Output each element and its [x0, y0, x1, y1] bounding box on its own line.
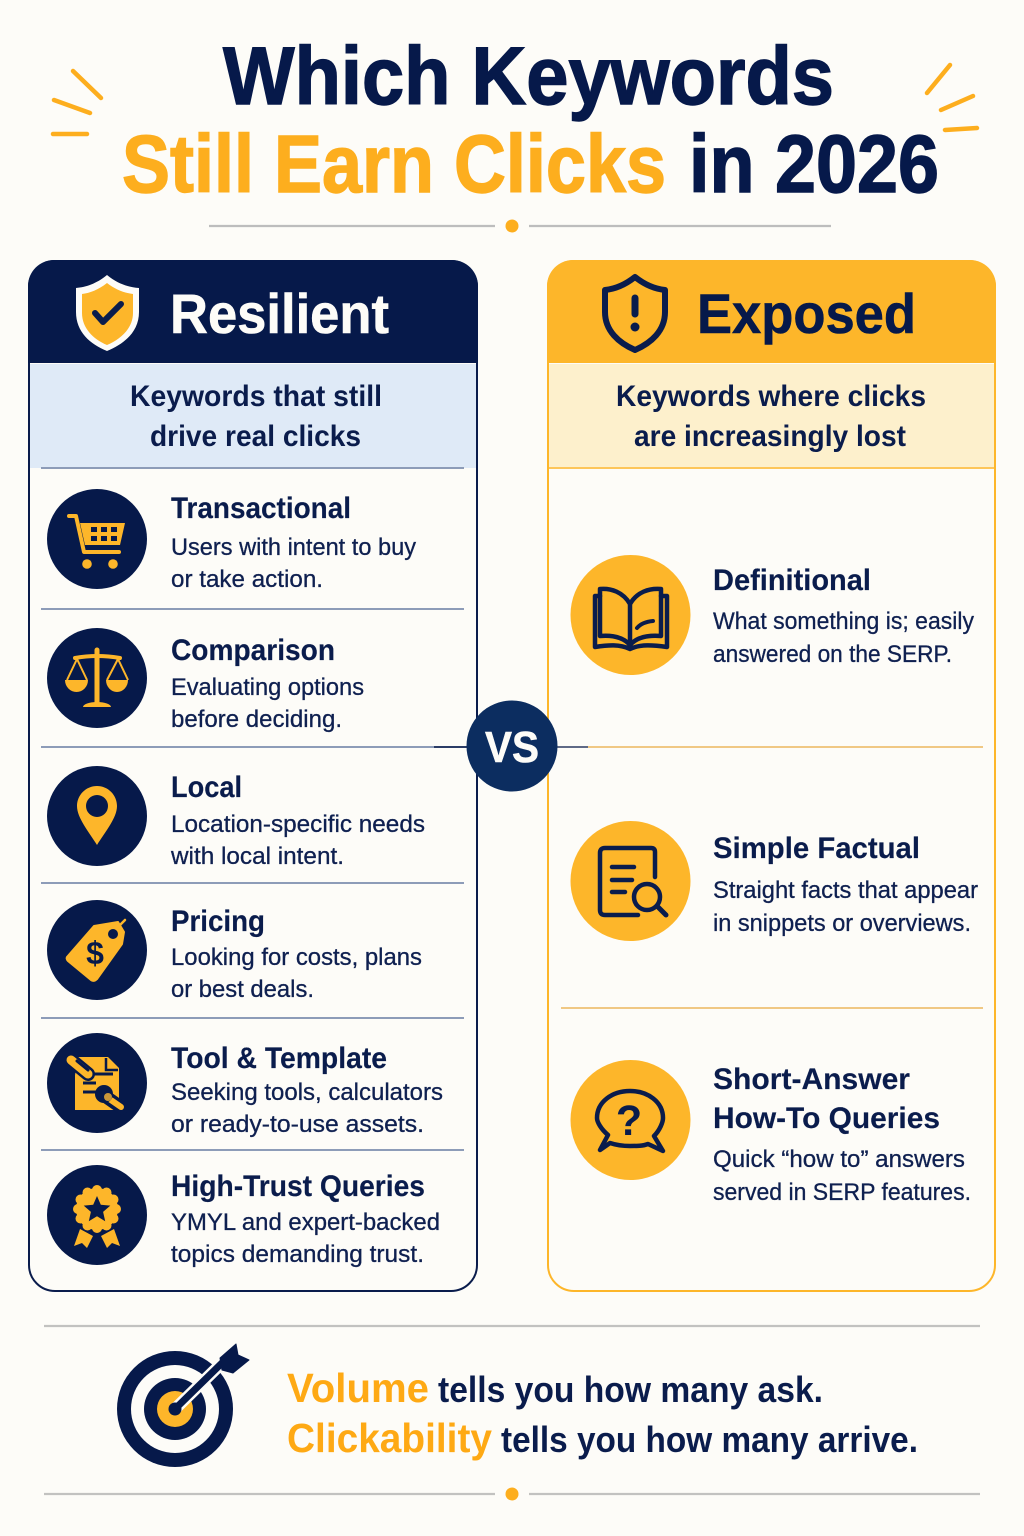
closing statement: tells you how many ask. — [438, 1369, 823, 1410]
panel: exposed — [547, 260, 996, 1291]
icon: question speech bubble: ? — [616, 1097, 642, 1145]
item: tool and template — [47, 1033, 443, 1138]
title: Still Earn Clicks — [122, 119, 666, 210]
icon: right sparkle accent — [927, 65, 977, 130]
item: transactional: or take action. — [171, 566, 323, 593]
icon: document with magnifier — [600, 848, 666, 915]
title divider — [209, 220, 831, 232]
item: transactional — [47, 489, 416, 593]
item: tool and template: Tool & Template — [171, 1042, 387, 1075]
item: definitional: What something is; easily — [713, 608, 974, 635]
icon: scales — [65, 650, 128, 707]
item: tool and template: or ready-to-use assets. — [171, 1111, 424, 1138]
footer bottom divider — [44, 1488, 980, 1500]
icon: target with arrow — [117, 1344, 249, 1467]
icon: shield with exclamation — [605, 277, 665, 350]
item: comparison: before deciding. — [171, 706, 342, 733]
icon: left sparkle accent — [53, 71, 101, 134]
resilient subtitle — [30, 364, 476, 468]
item: pricing: Pricing — [171, 905, 265, 938]
icon: shield with check — [76, 275, 139, 351]
icon: document with tools — [71, 1057, 122, 1110]
exposed heading: Exposed — [697, 282, 916, 345]
item: transactional: Transactional — [171, 492, 351, 525]
item: comparison — [47, 628, 364, 733]
item: short-answer how-to queries: How-To Queries — [713, 1102, 940, 1135]
title: in 2026 — [689, 119, 939, 210]
item: high-trust queries: topics demanding trust. — [171, 1241, 424, 1268]
exposed subtitle: Keywords where clicks — [616, 380, 926, 413]
item: definitional: Definitional — [713, 564, 871, 597]
item: pricing: or best deals. — [171, 976, 314, 1003]
item: simple factual: in snippets or overviews. — [713, 910, 971, 937]
closing statement: tells you how many arrive. — [501, 1419, 918, 1460]
item: high-trust queries: YMYL and expert-backed — [171, 1209, 440, 1236]
item: comparison: Comparison — [171, 634, 335, 667]
item: short-answer how-to queries: Short-Answer — [713, 1063, 910, 1096]
closing statement — [287, 1365, 918, 1461]
item: tool and template: Seeking tools, calculators — [171, 1079, 443, 1106]
icon: map pin — [77, 786, 117, 845]
icon: award badge — [73, 1185, 121, 1248]
exposed dividers — [549, 468, 994, 1008]
icon: price tag: $ — [86, 935, 104, 971]
item: short-answer how-to queries — [570, 1060, 971, 1206]
resilient subtitle: drive real clicks — [150, 420, 361, 453]
item: high-trust queries: High-Trust Queries — [171, 1170, 425, 1203]
item: high-trust queries — [47, 1165, 440, 1268]
item: local: Location-specific needs — [171, 811, 425, 838]
exposed subtitle — [549, 364, 994, 468]
vs badge: VS — [485, 723, 539, 772]
title — [122, 31, 939, 210]
panel: resilient — [28, 260, 478, 1291]
icon: open book — [595, 589, 667, 649]
item: pricing — [47, 900, 422, 1003]
item: comparison: Evaluating options — [171, 674, 364, 701]
resilient header bar — [28, 260, 478, 363]
title: Which Keywords — [223, 31, 834, 122]
row dividers — [41, 468, 464, 1150]
exposed header bar — [547, 260, 996, 363]
item: simple factual: Simple Factual — [713, 832, 920, 865]
item: pricing: Looking for costs, plans — [171, 944, 422, 971]
item: local: with local intent. — [170, 843, 344, 870]
item: short-answer how-to queries: Quick “how to” answers — [713, 1146, 965, 1173]
item: local: Local — [171, 771, 242, 804]
icon: cart — [69, 516, 125, 569]
closing statement: Clickability — [287, 1415, 492, 1461]
vs badge — [434, 700, 588, 792]
item: local — [47, 766, 425, 870]
footer top divider — [44, 1325, 980, 1327]
item: definitional — [570, 555, 974, 675]
icon: price tag — [67, 920, 125, 981]
item: short-answer how-to queries: served in SERP features. — [713, 1179, 971, 1206]
icon: question speech bubble — [597, 1091, 663, 1151]
resilient heading: Resilient — [170, 282, 389, 345]
item: simple factual: Straight facts that appear — [713, 877, 978, 904]
closing statement: Volume — [287, 1365, 429, 1411]
item: transactional: Users with intent to buy — [171, 534, 416, 561]
item: simple factual — [570, 821, 978, 941]
item: definitional: answered on the SERP. — [713, 641, 952, 668]
exposed subtitle: are increasingly lost — [634, 420, 906, 453]
resilient subtitle: Keywords that still — [130, 380, 382, 413]
